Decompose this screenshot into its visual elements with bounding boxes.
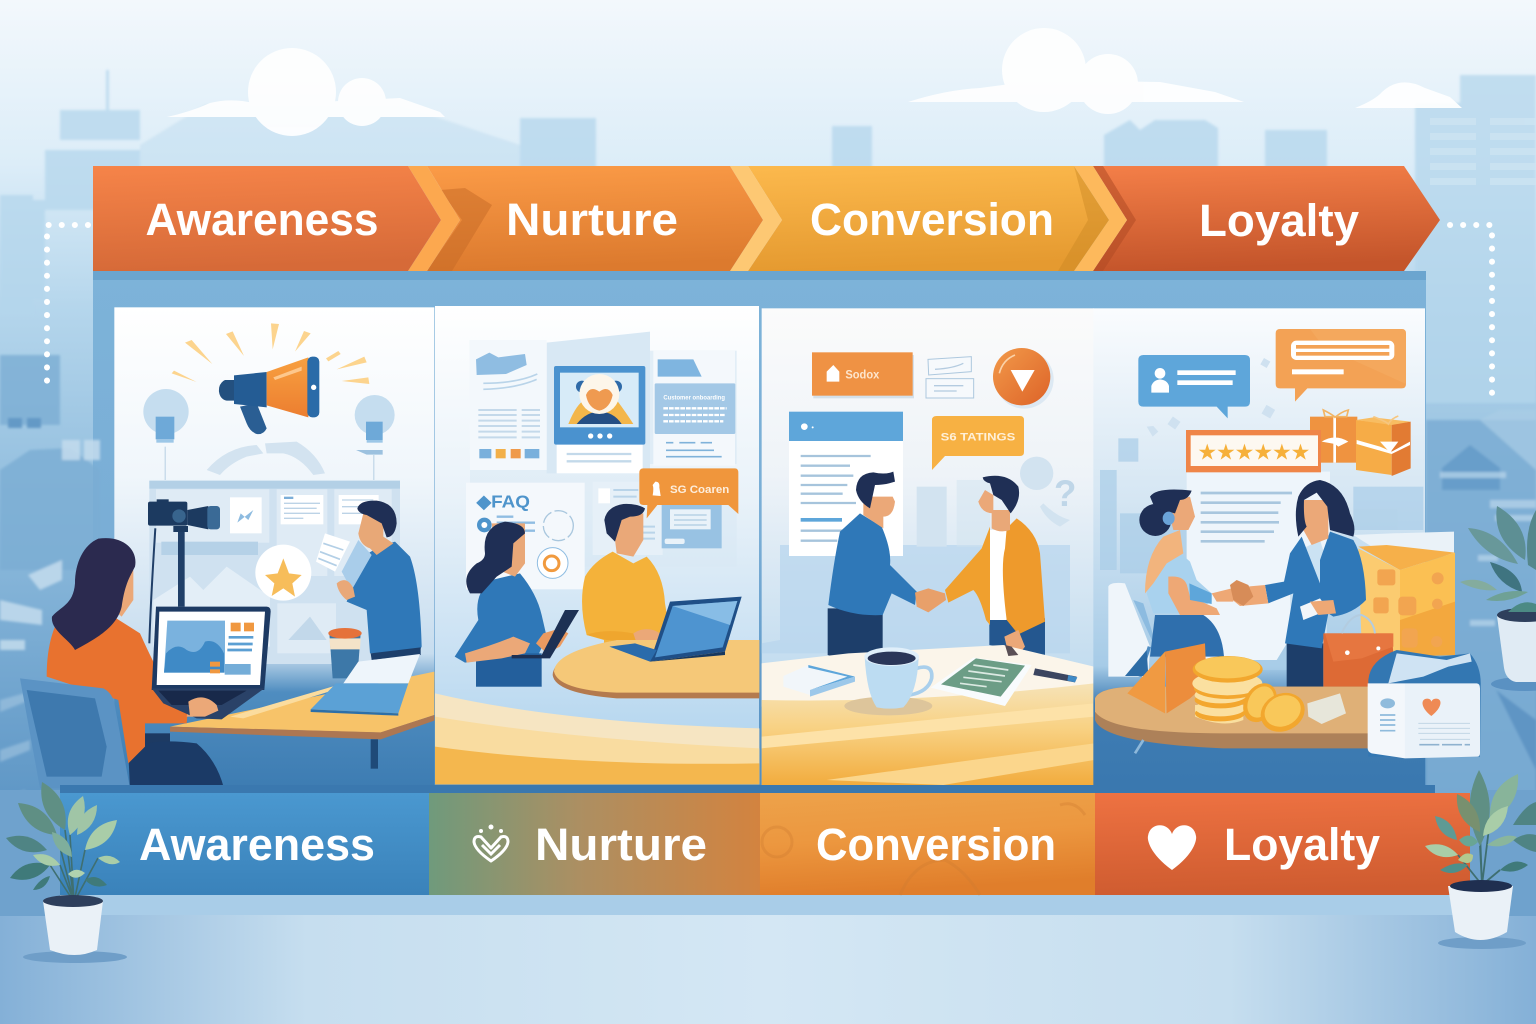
panel: Loyalty bbox=[1093, 308, 1481, 785]
person: man in blue bbox=[828, 472, 917, 665]
panel: Conversion bbox=[762, 308, 1094, 785]
segment: Conversion bbox=[760, 793, 1096, 895]
panel: Nurture bbox=[435, 306, 759, 784]
article card right bbox=[653, 351, 735, 466]
band shadow under banner bbox=[93, 271, 1426, 280]
star rating card: ★ bbox=[1216, 439, 1236, 464]
blurred city in panel bbox=[762, 545, 1070, 653]
arrow: Loyalty: Loyalty bbox=[1199, 195, 1359, 246]
desk bbox=[170, 672, 434, 769]
star rating card: ★ bbox=[1253, 439, 1273, 464]
segment: Loyalty: Loyalty bbox=[1224, 819, 1380, 870]
floor band bbox=[0, 895, 1536, 916]
FAQ card: ◆FAQ bbox=[476, 491, 530, 511]
small cards bbox=[926, 357, 974, 398]
icon: coffee mug bbox=[844, 647, 932, 715]
handshake bbox=[915, 588, 946, 612]
clouds bbox=[167, 28, 1462, 136]
person: man with tablet bbox=[316, 501, 422, 660]
building windows right bbox=[1430, 118, 1536, 185]
orange speech bubble bbox=[1276, 329, 1406, 402]
blurred city in panel bbox=[1100, 438, 1423, 670]
star rating card: ★ bbox=[1272, 439, 1292, 464]
icon: notebook on desk bbox=[311, 654, 420, 716]
right potted plant bbox=[1425, 770, 1536, 949]
star rating card: ★ bbox=[1291, 439, 1310, 464]
gift boxes bbox=[1310, 410, 1411, 476]
arrow: Nurture bbox=[427, 166, 782, 271]
FAQ card bbox=[466, 483, 585, 589]
segment: Nurture bbox=[429, 793, 761, 895]
arrow: Awareness: Awareness bbox=[146, 194, 378, 245]
star rating card: ★ bbox=[1197, 439, 1217, 464]
video call card bbox=[554, 366, 645, 473]
person: man in yellow bbox=[582, 504, 670, 650]
document window bbox=[789, 412, 903, 556]
icon: laptop bbox=[609, 597, 742, 662]
icon: star badge bbox=[255, 545, 311, 601]
arrow: Conversion: Conversion bbox=[810, 194, 1054, 245]
icon: laptop bbox=[152, 607, 271, 719]
person: woman at laptop bbox=[47, 538, 224, 788]
floor edge shading left bbox=[0, 790, 60, 916]
icon: video camera on tripod bbox=[148, 499, 220, 643]
orange label: Sodox bbox=[845, 368, 880, 382]
segment: Awareness: Awareness bbox=[139, 819, 375, 870]
icon: megaphone bbox=[172, 323, 369, 434]
folder on table bbox=[1127, 643, 1207, 713]
star rating card: ★ bbox=[1235, 439, 1254, 464]
floor bbox=[0, 915, 1536, 1024]
round table bbox=[1095, 687, 1370, 753]
orange label bbox=[812, 352, 914, 398]
orange gift box large bbox=[1353, 532, 1455, 657]
article card right: Customer onboarding bbox=[663, 394, 725, 401]
chair bbox=[20, 678, 130, 788]
speech bubble ratings: S6 TATINGS bbox=[941, 432, 1016, 444]
arrow: Awareness bbox=[93, 166, 460, 271]
icon: document and pen bbox=[931, 645, 1077, 706]
orange bag bbox=[1323, 615, 1393, 703]
background sheets bbox=[470, 332, 737, 567]
person: man in orange bbox=[945, 476, 1045, 655]
handshake bbox=[1230, 580, 1253, 606]
background city skyline bbox=[0, 70, 1536, 403]
icon: gold coins bbox=[1236, 677, 1311, 739]
right plant top bbox=[1460, 506, 1536, 691]
person: standing woman bbox=[1231, 480, 1366, 687]
display board bbox=[149, 481, 400, 664]
segment: Awareness bbox=[60, 793, 430, 895]
icon: orange button bbox=[993, 348, 1054, 409]
band behind panels bbox=[93, 271, 1426, 796]
table bbox=[762, 645, 1094, 785]
arrow: Nurture: Nurture bbox=[506, 194, 678, 245]
icon: left bulb bbox=[143, 389, 189, 480]
top process arrow banner bbox=[93, 166, 1440, 271]
dotted connector right bbox=[1450, 225, 1492, 395]
panel background bbox=[114, 307, 434, 788]
arrow: Loyalty bbox=[1093, 166, 1440, 271]
decorative arrows arc bbox=[207, 442, 325, 475]
callout: SG Coaren bbox=[670, 484, 730, 496]
speech bubble ratings bbox=[932, 416, 1024, 470]
icon: right bulb bbox=[355, 395, 395, 480]
faint shapes bbox=[917, 457, 1070, 547]
left potted plant bbox=[6, 782, 127, 963]
faint decorative shapes bbox=[1147, 358, 1275, 437]
segment: Conversion: Conversion bbox=[816, 819, 1056, 870]
review document bbox=[1187, 472, 1330, 660]
floor edge shading right bbox=[1470, 790, 1536, 916]
person: seated woman bbox=[1139, 490, 1233, 657]
bottom strip under panels bbox=[60, 785, 1435, 794]
dotted connector left bbox=[47, 225, 88, 392]
icon: stack of cash bbox=[1307, 693, 1346, 724]
panel background bbox=[1093, 308, 1425, 785]
chair bbox=[1108, 583, 1193, 677]
panel background bbox=[435, 306, 759, 784]
arrow: Conversion bbox=[748, 166, 1127, 271]
floor waves bbox=[435, 693, 759, 784]
left side city details bbox=[0, 355, 100, 935]
callout bbox=[639, 468, 738, 518]
person: woman with tablet bbox=[455, 522, 579, 687]
icon: closed book bbox=[783, 665, 855, 697]
icon: coin stack bbox=[1192, 656, 1263, 723]
blue speech bubble bbox=[1138, 355, 1250, 418]
middle document bbox=[593, 482, 722, 555]
bottom stage bar bbox=[60, 793, 1470, 895]
panel: Awareness bbox=[20, 307, 434, 788]
panel background bbox=[762, 308, 1094, 785]
segment: Nurture: Nurture bbox=[535, 819, 707, 870]
document card left bbox=[469, 340, 547, 470]
segment: Loyalty bbox=[1095, 793, 1470, 895]
star rating card bbox=[1186, 430, 1321, 472]
right side city details bbox=[1426, 410, 1536, 800]
icon: blue pouch and brochure bbox=[1368, 650, 1481, 758]
round table bbox=[553, 640, 759, 698]
question mark: ? bbox=[1054, 473, 1076, 514]
icon: coffee cup bbox=[328, 628, 362, 678]
